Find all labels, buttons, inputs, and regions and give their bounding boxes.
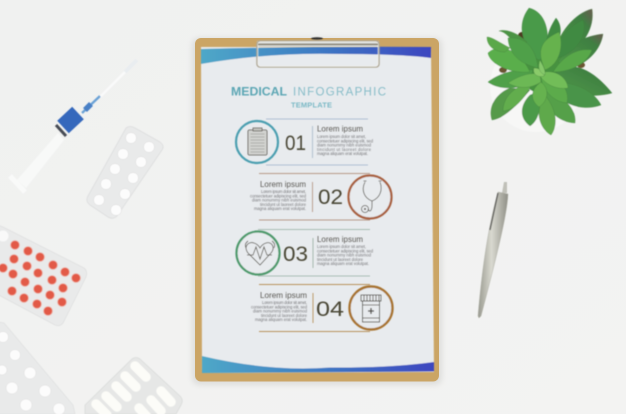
number 01: 01 xyxy=(285,132,306,155)
text block 01: tincidunt ut laoreet dolore xyxy=(317,147,372,152)
text block 01: Lorem ipsum dolor sit amet, xyxy=(317,134,366,139)
pen xyxy=(478,182,508,318)
text block 04 xyxy=(251,290,308,322)
metal clip xyxy=(257,37,379,67)
number 02: 02 xyxy=(318,186,343,209)
text block 03: Lorem ipsum dolor sit amet, xyxy=(317,244,366,249)
text block 02: Lorem ipsum xyxy=(260,179,306,189)
blister: red pills xyxy=(0,224,87,326)
number 04: 04 xyxy=(316,298,344,321)
text block 02: consectetuer adipiscing elit, sed xyxy=(250,193,307,198)
text block 04: magna aliquam erat volutpat. xyxy=(255,317,307,322)
text block 03: Lorem ipsum xyxy=(317,234,363,244)
blister: large white tablets xyxy=(0,322,75,414)
top colour wave xyxy=(201,47,431,64)
blister: capsules xyxy=(85,358,182,414)
number 03: 03 xyxy=(283,243,308,266)
step 04 xyxy=(251,284,392,332)
icon: clipboard xyxy=(236,121,278,163)
text block 04: tincidunt ut laoreet dolore xyxy=(261,313,308,318)
text block 02: magna aliquam erat volutpat. xyxy=(254,206,306,211)
text block 01: Lorem ipsum xyxy=(317,124,363,134)
text block 03: diam nonummy nibh euismod xyxy=(317,253,372,258)
title: INFOGRAPHIC xyxy=(293,86,386,98)
bottom colour wave xyxy=(202,356,434,373)
blister: white tablets xyxy=(87,126,163,218)
text block 01: diam nonummy nibh euismod xyxy=(317,143,372,148)
text block 03: tincidunt ut laoreet dolore xyxy=(317,257,364,262)
text block 02: diam nonummy nibh euismod xyxy=(252,198,307,203)
syringe xyxy=(10,60,137,192)
step 02 xyxy=(250,174,392,220)
text block 03: magna aliquam erat volutpat. xyxy=(317,261,369,266)
title: MEDICAL xyxy=(231,86,287,98)
text block 01 xyxy=(317,124,374,156)
icon: medicine bottle xyxy=(350,286,392,330)
text block 04: consectetuer adipiscing elit, sed xyxy=(251,304,308,309)
text block 02 xyxy=(250,179,307,211)
clipboard xyxy=(192,37,442,385)
step 03 xyxy=(236,230,374,276)
text block 03: consectetuer adipiscing elit, sed xyxy=(317,248,374,253)
title: TEMPLATE xyxy=(291,100,332,110)
icon: heartbeat xyxy=(236,232,280,274)
title xyxy=(231,86,386,110)
paper sheet xyxy=(201,47,434,373)
icon: stethoscope xyxy=(348,176,392,218)
text block 04: Lorem ipsum xyxy=(260,290,307,300)
clipboard backing board xyxy=(195,38,439,382)
text block 01: magna aliquam erat volutpat. xyxy=(317,151,368,156)
step 01 xyxy=(236,119,374,165)
text block 01: consectetuer adipiscing elit, sed xyxy=(317,138,374,143)
text block 02: tincidunt ut laoreet dolore xyxy=(260,202,307,207)
text block 02: Lorem ipsum dolor sit amet, xyxy=(261,189,306,194)
potted succulent xyxy=(487,8,612,135)
text block 03 xyxy=(317,234,374,266)
text block 04: diam nonummy nibh euismod xyxy=(253,309,308,314)
text block 04: Lorem ipsum dolor sit amet, xyxy=(262,300,307,305)
